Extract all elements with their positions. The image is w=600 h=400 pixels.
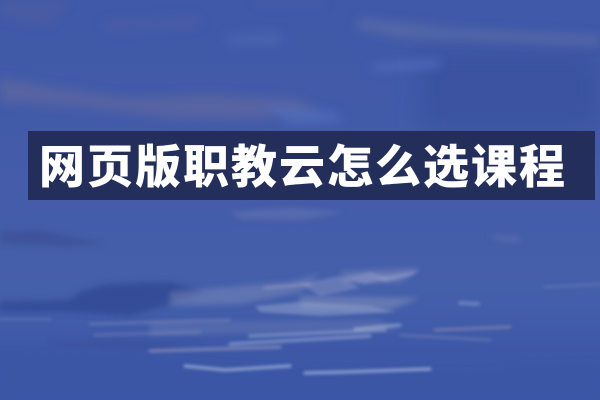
lower haze and horizon	[0, 352, 600, 400]
clouds	[150, 268, 420, 336]
title: 网页版职教云怎么选课程	[39, 131, 567, 197]
title banner	[28, 131, 595, 200]
